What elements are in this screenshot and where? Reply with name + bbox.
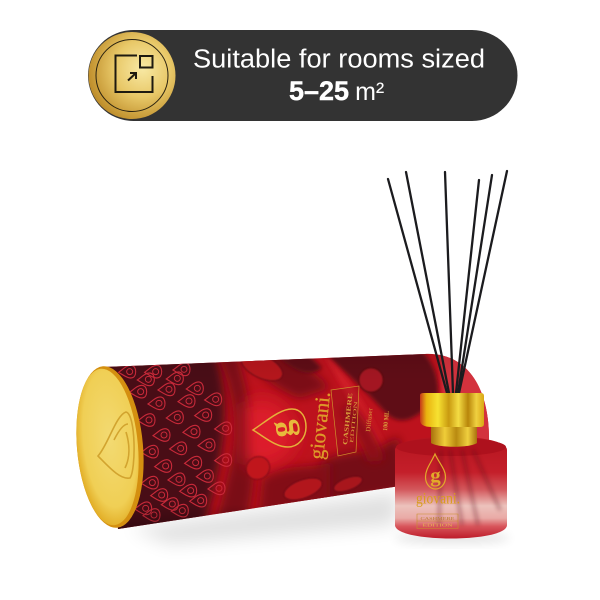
reeds [388,171,507,393]
ground shadow [130,492,510,544]
label box on tube: EDITION [350,400,359,443]
icon: gold room-size medallion [88,32,176,119]
gold drop logo [253,409,306,447]
bottle drop logo: g [430,463,441,487]
gold drop logo: g [262,419,301,440]
gold cap [420,393,484,427]
product: cylindrical gift tube [76,354,490,529]
glass bottle [395,436,507,538]
badge text line 2: 5–25m² [289,76,384,106]
bottle label [417,514,458,528]
product type on tube: Diffuser [365,407,375,432]
pattern of drop logos [119,363,232,521]
gem details [240,360,384,500]
bottle brand name: giovani. [416,490,460,508]
badge text line 1: Suitable for rooms sized [193,46,485,74]
badge: room size [88,30,518,121]
label box on tube [331,386,359,456]
tube body [107,354,490,529]
product: reed diffuser [388,171,507,538]
volume on tube: 100 ML [382,410,391,431]
gold tube end cap [70,363,150,531]
label box on tube: CASHMERE [342,393,354,445]
gold neck [431,426,477,447]
bottle label: CASHMERE [420,516,455,521]
brand name on tube: giovani. [304,390,335,461]
bottle label: EDITION [422,522,453,528]
